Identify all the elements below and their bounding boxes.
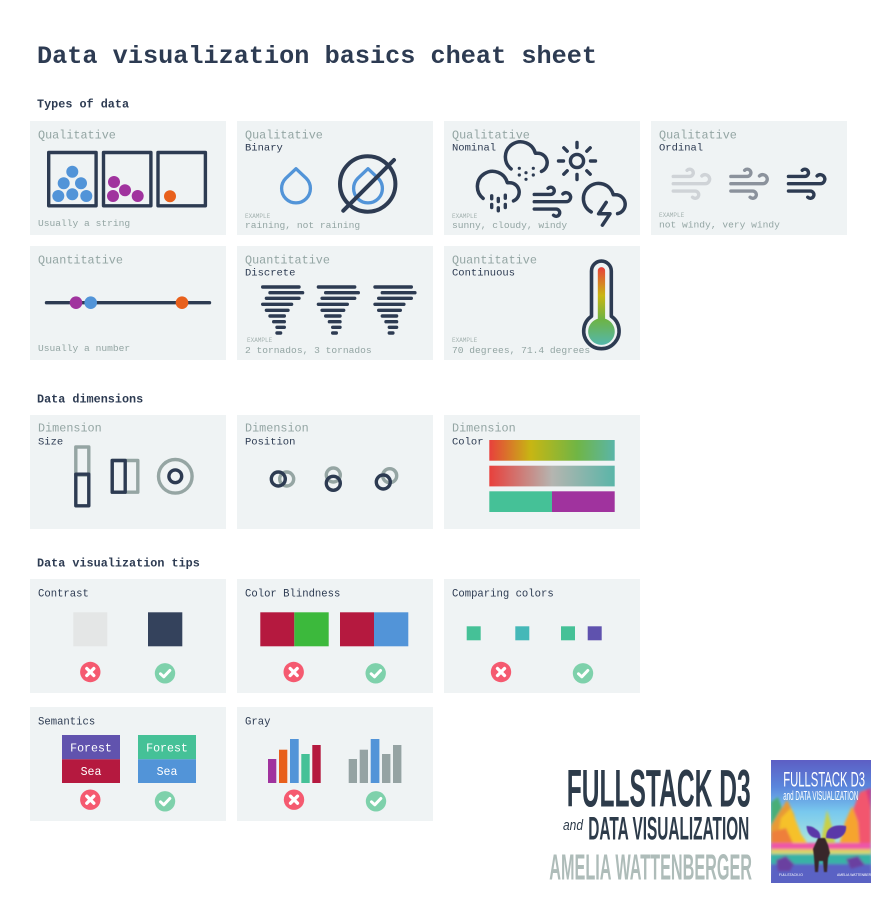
icon: lightning cloud [583, 183, 625, 225]
good semantic color labels [138, 735, 196, 783]
panel: semantics [30, 707, 226, 821]
icon: rain cloud [477, 171, 519, 211]
panel: qualitative [30, 121, 226, 235]
panel: qualitative: Usually a string [38, 218, 130, 229]
book cover [771, 760, 879, 883]
icon: rain drop [282, 169, 310, 203]
panel: qualitative binary: raining, not raining [245, 220, 360, 231]
book logo text: and [563, 817, 584, 834]
similar color squares [467, 626, 529, 640]
panel: color blindness: Color Blindness [245, 588, 340, 600]
panel: quantitative continuous [444, 246, 640, 360]
icon: right [573, 663, 593, 684]
icon: crossed-out rain drop [340, 156, 395, 212]
panel: qualitative binary: Qualitative [245, 128, 323, 142]
panel: qualitative nominal [444, 121, 640, 235]
poor semantic color labels: Forest [70, 742, 112, 756]
icon: wrong [284, 662, 304, 682]
panel: contrast: Contrast [38, 588, 89, 600]
panel: qualitative binary [237, 121, 433, 235]
panel: qualitative nominal: Qualitative [452, 128, 530, 142]
icon: wrong [491, 662, 511, 682]
icon: sun [558, 142, 596, 180]
panel: dimension size: Size [38, 436, 63, 448]
icon: wrong [80, 662, 100, 682]
icon: tall bars [76, 447, 89, 506]
panel: qualitative ordinal: Qualitative [659, 128, 737, 142]
panel: dimension position: Dimension [245, 422, 309, 436]
panel: dimension size [30, 415, 226, 529]
icon: wrong [80, 790, 100, 810]
panel: quantitative: Quantitative [38, 254, 123, 268]
panel: quantitative discrete [237, 246, 433, 360]
good semantic color labels: Sea [157, 766, 177, 779]
book cover: AMELIA WATTENBERGER [837, 873, 879, 877]
panel: quantitative continuous: Continuous [452, 268, 515, 280]
icon: wrong [284, 790, 304, 810]
low contrast swatch [73, 612, 107, 646]
panel: dimension color: Color [452, 436, 484, 448]
panel: qualitative nominal: Nominal [452, 142, 496, 154]
panel: gray [237, 707, 433, 821]
icon: snow cloud [505, 142, 547, 181]
icon: circles diagonal offset [376, 469, 397, 489]
icon: right [155, 663, 175, 684]
panel: dimension color [444, 415, 640, 529]
panel: quantitative continuous: EXAMPLE [452, 337, 478, 344]
panel: quantitative continuous: Quantitative [452, 254, 537, 268]
heading: data dimensions: Data dimensions [37, 392, 143, 406]
panel: quantitative continuous: 70 degrees, 71.4 degrees [452, 345, 590, 356]
icon: circles vertical offset [326, 468, 340, 490]
poor semantic color labels: Sea [81, 766, 101, 779]
icon: wide bars [112, 460, 138, 492]
panel: comparing colors [444, 579, 640, 693]
icon: right [366, 791, 386, 812]
diverging gradient bar [489, 466, 615, 486]
panel: semantics: Semantics [38, 716, 95, 728]
icon: circles horizontal offset [271, 472, 294, 486]
panel: qualitative nominal: sunny, cloudy, windy [452, 220, 567, 231]
red green swatch [260, 612, 329, 646]
poor semantic color labels [62, 735, 120, 783]
panel: gray: Gray [245, 716, 270, 728]
panel: dimension position [237, 415, 433, 529]
panel: qualitative nominal: EXAMPLE [452, 213, 478, 220]
panel: comparing colors: Comparing colors [452, 588, 554, 600]
panel: qualitative binary: Binary [245, 142, 283, 154]
multicolor bar chart [268, 739, 321, 783]
rainbow gradient bar [489, 440, 615, 461]
heading: types of data: Types of data [37, 98, 129, 112]
panel: dimension color: Dimension [452, 422, 516, 436]
panel: quantitative discrete: EXAMPLE [247, 337, 273, 344]
icon: right [366, 663, 386, 684]
panel: quantitative [30, 246, 226, 360]
heading: data visualization tips: Data visualization tips [37, 556, 200, 570]
panel: dimension size: Dimension [38, 422, 102, 436]
icon: wind [534, 187, 571, 216]
panel: color blindness [237, 579, 433, 693]
icon: thermometer [584, 261, 619, 349]
panel: dimension position: Position [245, 436, 295, 448]
icon: nested circles [158, 460, 192, 493]
number line chart [46, 296, 210, 309]
title: Data visualization basics cheat sheet [37, 42, 597, 71]
panel: qualitative: Qualitative [38, 128, 116, 142]
book logo text [549, 760, 752, 887]
icon: tornado 2 [318, 287, 358, 333]
icon: three boxes of dots [49, 152, 205, 206]
panel: contrast [30, 579, 226, 693]
two-color categorical bar [489, 491, 615, 512]
panel: quantitative discrete: 2 tornados, 3 tornados [245, 345, 372, 356]
panel: qualitative ordinal [651, 121, 847, 235]
high contrast swatch [148, 612, 182, 646]
icon: tornado 3 [375, 287, 415, 333]
book cover: FULLSTACK.IO [779, 873, 803, 877]
icon: strong wind [788, 169, 825, 198]
panel: qualitative ordinal: not windy, very windy [659, 220, 780, 230]
panel: qualitative ordinal: EXAMPLE [659, 212, 685, 219]
icon: medium wind [731, 169, 767, 198]
panel: qualitative binary: EXAMPLE [245, 213, 271, 220]
icon: light wind [673, 169, 710, 198]
panel: quantitative discrete: Quantitative [245, 254, 330, 268]
panel: qualitative ordinal: Ordinal [659, 142, 703, 154]
red blue swatch [340, 612, 408, 646]
distinct color squares [561, 626, 602, 640]
gray highlighted bar chart [349, 739, 401, 783]
panel: quantitative: Usually a number [38, 343, 130, 354]
good semantic color labels: Forest [146, 742, 188, 756]
panel: quantitative discrete: Discrete [245, 268, 295, 280]
icon: right [155, 791, 175, 812]
icon: tornado 1 [263, 287, 303, 333]
